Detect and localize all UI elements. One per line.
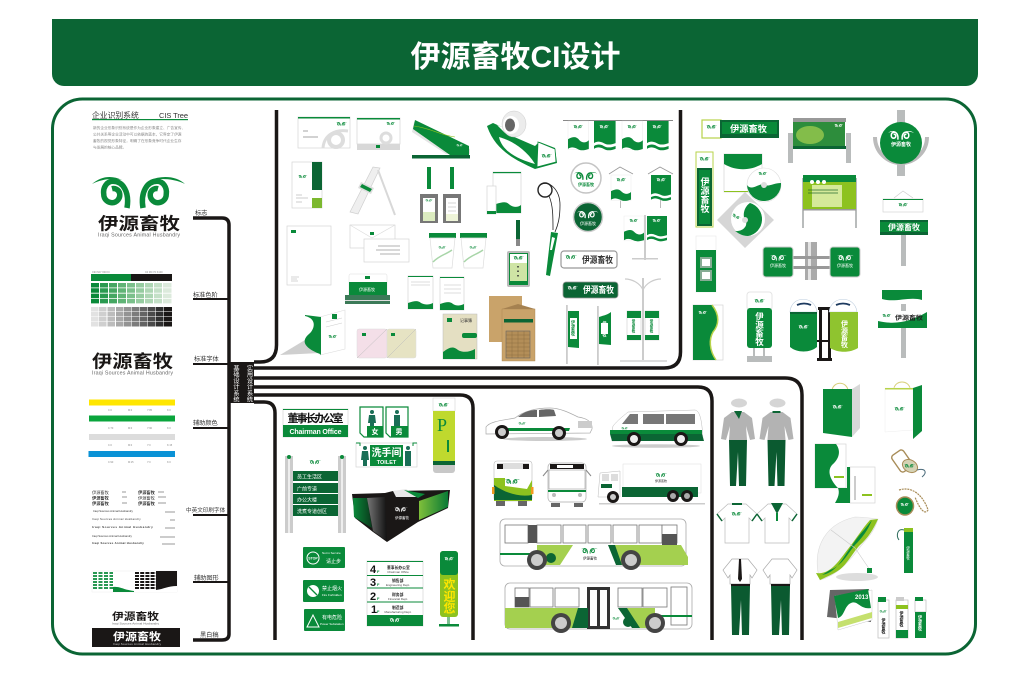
title banner: 伊源畜牧CI设计 <box>410 41 620 74</box>
auxiliary colors: M:15 <box>128 461 134 464</box>
street banner poles <box>566 305 611 365</box>
floor directory: 2 <box>370 591 376 603</box>
Chinese and English print fonts: 伊源畜牧 <box>92 489 110 496</box>
direction sign <box>285 455 346 533</box>
sign: electric hazard: Power Substation <box>320 622 344 626</box>
polo back <box>717 503 757 543</box>
vertical board <box>696 236 716 292</box>
green desk folder <box>345 274 390 304</box>
folder with shadow <box>280 310 345 355</box>
Chinese and English print fonts: Iraqi Sources Animal Husbandry <box>92 534 133 538</box>
toilet sign: TOILET <box>377 460 397 466</box>
vertical sign <box>696 152 713 227</box>
round sign <box>875 110 927 176</box>
label: auxiliary graphics: 辅助图形 <box>194 574 219 582</box>
letterhead <box>287 226 331 285</box>
CD sleeve diamond <box>717 192 774 248</box>
wave brochure <box>693 305 723 360</box>
black and white logo: Iraqi Sources Animal Husbandry <box>112 622 159 626</box>
directional sign top: 伊源畜牧 <box>888 222 920 232</box>
auxiliary colors: C:0 <box>108 444 112 447</box>
auxiliary colors: M:0 <box>128 444 133 447</box>
lanyard badges <box>420 167 461 223</box>
paper cups <box>429 233 487 268</box>
auxiliary colors: C:0 <box>108 409 112 412</box>
lamp post banners <box>620 278 667 362</box>
title banner <box>52 19 978 86</box>
auxiliary colors: Y:0 <box>147 444 151 447</box>
silver plaque <box>561 251 617 268</box>
desk calendar: 2013 <box>855 595 869 601</box>
directional sign bottom: 伊源畜牧 <box>895 314 923 322</box>
lighter striped: 伊源畜牧 <box>900 610 904 628</box>
standard color scale: C0 M0 Y0 K100 <box>145 271 163 274</box>
hanging flag stands <box>609 167 673 208</box>
green plaque: 伊源畜牧 <box>583 284 614 295</box>
bus rear <box>492 461 534 506</box>
vertical sign: 伊源畜牧 <box>700 176 710 214</box>
auxiliary colors: C:90 <box>108 461 114 464</box>
floor directory: 3 <box>370 577 376 589</box>
label: black and white: 黑白稿 <box>200 631 219 639</box>
metal badge <box>571 163 601 193</box>
panel: outdoor signage <box>693 110 928 362</box>
van <box>610 410 704 448</box>
door sign: 伊源畜牧 <box>730 123 767 134</box>
notebook: 记事簿 <box>460 317 472 323</box>
intro text <box>93 125 185 150</box>
folder with sheet <box>487 172 521 214</box>
polo front <box>757 503 797 543</box>
reception desk <box>352 489 450 542</box>
direction sign: 办公大楼 <box>297 496 317 504</box>
floor directory: 销售部 <box>392 578 404 583</box>
business card front <box>298 117 350 148</box>
notebook <box>443 314 477 359</box>
work uniform back <box>760 398 794 486</box>
floor directory <box>367 561 423 626</box>
toilet sign: 洗手间 <box>372 446 402 459</box>
shirt and tie front <box>723 559 757 635</box>
parking column: P <box>437 415 447 435</box>
ID card on lanyard <box>507 220 530 287</box>
totem sign <box>747 292 772 362</box>
CD folder <box>724 154 762 192</box>
intro text: 与发展的核心品牌。 <box>93 144 126 150</box>
lighters <box>878 597 926 638</box>
green plaque <box>563 282 618 298</box>
standard typeface: Iraqi Sources Animal Husbandry <box>92 370 173 376</box>
envelopes <box>350 225 409 262</box>
floor directory: 制造部 <box>392 605 404 610</box>
auxiliary colors: Y:90 <box>147 427 153 430</box>
restroom icons: 男 <box>396 428 402 436</box>
metal badge: 伊源畜牧 <box>578 181 594 187</box>
brand logo: 伊源畜牧 <box>98 214 180 234</box>
twin pole sign: 伊源畜牧 <box>770 262 786 268</box>
heading: CIS tree: 企业识别系统 <box>92 110 139 120</box>
Chinese and English print fonts: Iraqi Sources Animal Husbandry <box>92 541 144 545</box>
auxiliary colors: Y:0 <box>147 461 151 464</box>
auxiliary colors: K:0 <box>167 461 171 464</box>
Chinese and English print fonts: Iraqi Sources Animal Husbandry <box>92 525 153 529</box>
sign: electric hazard <box>304 609 345 631</box>
sign: electric hazard: 有电危险 <box>322 614 342 621</box>
standard typeface <box>92 352 174 376</box>
Chinese and English print fonts: Iraqi Sources Animal Husbandry <box>92 517 141 521</box>
city bus one <box>500 519 688 570</box>
umbrella <box>816 517 878 581</box>
vertical letter card <box>292 162 322 208</box>
heading: CIS tree: CIS Tree <box>159 111 188 120</box>
floor directory: 董事长办公室 <box>387 565 410 570</box>
label: standard colors: 标准色阶 <box>193 291 218 299</box>
brochure set <box>815 444 875 503</box>
CIS tree connector lines <box>193 110 802 640</box>
auxiliary colors: C:70 <box>108 427 114 430</box>
black and white logo: 伊源畜牧 <box>112 610 159 623</box>
gift bag green <box>823 383 860 437</box>
restroom icons <box>360 407 408 437</box>
sedan <box>486 408 592 441</box>
brand logo <box>92 177 185 238</box>
city bus two <box>505 583 692 633</box>
label: print fonts: 中英文印刷字体 <box>186 506 226 514</box>
panel: office stationery <box>280 111 673 365</box>
directional sign bottom <box>878 290 927 358</box>
green badge <box>574 202 602 232</box>
Chinese and English print fonts: 伊源畜牧 <box>92 500 110 507</box>
standard color scale: C90 M0 Y90 K0 <box>92 271 110 274</box>
CD disc <box>747 168 781 202</box>
silver plaque: 伊源畜牧 <box>582 254 613 265</box>
heading: CIS tree <box>92 110 188 120</box>
floor directory: 4 <box>370 564 377 576</box>
sign: no fire: 禁止烟火 <box>322 585 342 592</box>
panel: basic design system <box>88 110 226 647</box>
floor directory: F <box>377 596 380 601</box>
Chinese and English print fonts <box>92 489 175 545</box>
auxiliary colors <box>88 400 175 464</box>
business card back <box>357 118 400 150</box>
panel: gifts <box>815 382 928 638</box>
Chinese and English print fonts: 伊源畜牧 <box>138 500 156 507</box>
floor directory: F <box>377 609 380 614</box>
round sign: 伊源畜牧 <box>891 141 911 148</box>
panel: uniforms <box>717 398 797 635</box>
sign: no fire: Fire Forbidden <box>322 593 342 597</box>
label: standard font: 标准字体 <box>194 355 220 363</box>
lamp post banners: 伊源畜牧 <box>649 318 654 334</box>
chairman office sign: 董事长办公室 <box>288 411 344 425</box>
floor directory: 财务部 <box>392 592 404 597</box>
black and white logo <box>92 610 180 647</box>
stapler <box>412 120 470 158</box>
folding umbrella: 伊源畜牧 <box>905 545 910 561</box>
kraft envelopes <box>489 296 535 361</box>
gift bag white <box>885 382 922 439</box>
forms <box>408 276 464 310</box>
Chinese and English print fonts: 伊源畜牧 <box>138 489 156 496</box>
floor directory: Chairman Office <box>387 570 409 574</box>
direction sign: 广前专道 <box>297 486 317 492</box>
sign: stop: 请止步 <box>326 558 341 565</box>
twin pole sign: 伊源畜牧 <box>837 262 853 268</box>
welcome totem <box>439 551 459 626</box>
pen with lanyard <box>538 183 560 276</box>
floor directory: Engineering Dept. <box>386 583 410 587</box>
intro text: 新的企业形象识别系统是作为企业形象建立、广告宣传、 <box>93 125 185 130</box>
auxiliary colors: Y:85 <box>147 409 153 412</box>
hanging flags row <box>563 120 673 150</box>
keychain one <box>891 449 925 477</box>
folding card stand <box>350 167 395 215</box>
auxiliary colors: M:0 <box>128 409 133 412</box>
CIS tree connector lines: 基础设计系统 <box>232 364 239 403</box>
toilet sign <box>356 443 417 467</box>
billboard <box>788 118 851 163</box>
panel: vehicles <box>486 408 705 633</box>
Chinese and English print fonts: 伊源畜牧 <box>92 494 110 502</box>
direction sign: 员工生活区 <box>297 474 322 480</box>
auxiliary colors: K:0 <box>167 427 171 430</box>
brand logo: Iraqi Sources Animal Husbandry <box>98 232 180 238</box>
green badge: 伊源畜牧 <box>580 220 596 226</box>
standard color scale <box>91 271 172 326</box>
sign: stop <box>303 547 345 568</box>
welcome totem: 欢迎您 <box>442 577 456 614</box>
shirt back <box>763 559 797 635</box>
street banner poles: 伊源畜牧 <box>602 320 608 338</box>
intro text: 畜牧的视觉形象特征，明确了在形象竞争时代企业生存 <box>93 138 182 143</box>
lighter white: 伊源畜牧 <box>882 617 886 635</box>
city bus one: 伊源畜牧 <box>583 556 597 560</box>
lamp post banners: 伊源畜牧 <box>631 318 636 334</box>
parking column <box>433 398 455 473</box>
work uniform front <box>721 398 755 486</box>
auxiliary colors: M:0 <box>128 427 133 430</box>
sign: stop: STOP <box>308 556 318 560</box>
auxiliary colors: K:15 <box>167 444 173 447</box>
folding umbrella <box>897 528 913 573</box>
truck: 伊源畜牧 <box>655 478 667 483</box>
auxiliary graphics <box>92 571 177 592</box>
floor directory: 1 <box>371 604 377 616</box>
truck <box>598 464 705 504</box>
desk calendar <box>827 589 872 630</box>
floor directory: Manufacturing Dept. <box>384 610 412 614</box>
black and white logo: 伊源畜牧 <box>113 630 162 643</box>
chairman office sign: Chairman Office <box>290 429 342 436</box>
trash bins: 伊源畜牧 <box>840 319 848 349</box>
panel: indoor signage <box>283 398 459 631</box>
door sign <box>702 120 779 138</box>
street banner poles: 伊源畜牧 <box>571 319 576 337</box>
outer frame <box>52 99 976 654</box>
floor directory: F <box>377 569 380 574</box>
floor directory: F <box>377 582 380 587</box>
label: auxiliary colors: 辅助颜色 <box>193 419 218 427</box>
totem sign: 伊源畜牧 <box>754 311 764 347</box>
lighter green: 伊源畜牧 <box>918 614 923 632</box>
prohibition signs <box>303 547 345 631</box>
chairman office sign <box>283 409 348 437</box>
double flag pole <box>624 215 667 260</box>
restroom icons: 女 <box>372 427 378 436</box>
tape dispenser <box>487 111 557 169</box>
floor directory: Financial Dept. <box>388 597 408 601</box>
directional sign top <box>880 191 928 266</box>
Chinese and English print fonts: 伊源畜牧 <box>138 494 156 502</box>
CIS tree connector lines: 实用设计系统 <box>246 364 253 403</box>
keychain two <box>896 489 928 515</box>
standard typeface: 伊源畜牧 <box>92 352 174 372</box>
twin pole sign <box>763 242 860 280</box>
green desk folder: 伊源畜牧 <box>359 286 375 292</box>
auxiliary colors: K:0 <box>167 409 171 412</box>
bus front <box>543 463 591 507</box>
reception desk: 伊源畜牧 <box>395 515 409 520</box>
napkins <box>357 329 416 358</box>
trash bins <box>790 299 858 361</box>
sign: stop: Not in Service <box>322 551 341 555</box>
label: logo: 标志 <box>195 209 207 217</box>
Chinese and English print fonts: Iraqi Sources Animal Husbandry <box>93 509 134 513</box>
black and white logo: Iraqi Sources Animal Husbandry <box>113 642 162 646</box>
sign: no fire <box>303 580 344 602</box>
info board <box>802 175 857 228</box>
intro text: 公共关系等企业活动中可以依据的蓝本，它界定了伊源 <box>93 132 182 136</box>
direction sign: 洗煮专道创区 <box>297 508 327 515</box>
